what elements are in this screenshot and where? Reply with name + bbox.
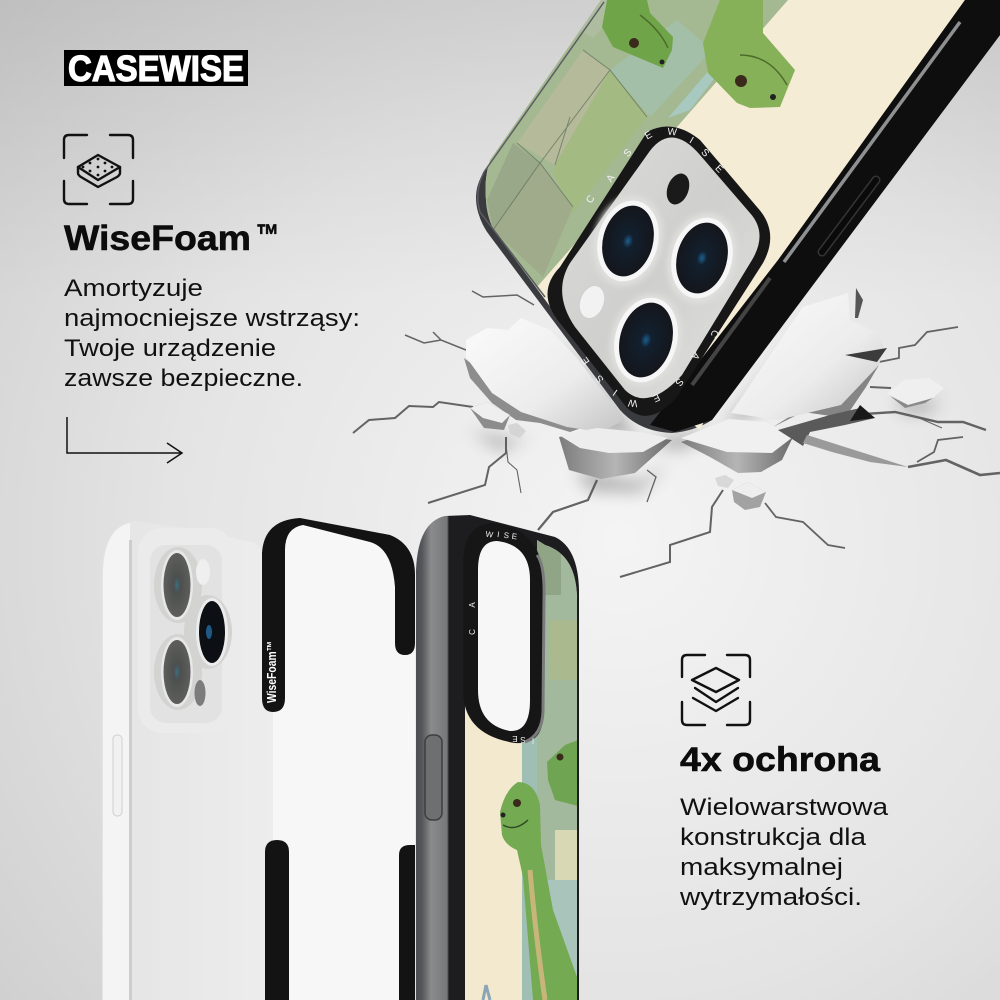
ring lettering: E	[511, 532, 518, 541]
wall crack: centre slabs	[559, 419, 793, 510]
camera opening	[478, 541, 530, 731]
ring lettering: C	[584, 193, 598, 206]
ring lettering: E	[650, 391, 661, 404]
black side rail	[650, 0, 1000, 432]
camera ring	[548, 127, 770, 416]
small rocks, below	[715, 475, 766, 510]
case outer frame	[476, 0, 1000, 433]
camera ring	[463, 523, 543, 743]
case body	[416, 515, 579, 1000]
ring lettering: S	[699, 147, 711, 160]
lens one	[161, 550, 193, 620]
ring lettering: E	[713, 163, 725, 176]
side button	[822, 180, 876, 252]
ring lettering: A	[605, 172, 618, 184]
text block: 4x protection description	[679, 794, 889, 911]
ring lettering: S	[520, 735, 526, 744]
heading: WiseFoam: WiseFoam	[64, 219, 251, 258]
ring lettering: A	[468, 602, 477, 608]
dinosaur head two	[703, 0, 795, 108]
icon: foam pad in focus brackets	[64, 135, 133, 204]
text block: WiseFoam description: Amortyzuje	[64, 275, 203, 302]
text block: WiseFoam description: najmocniejsze wstrząsy:	[64, 305, 360, 332]
tile joints	[493, 50, 647, 230]
side button	[113, 735, 122, 816]
crack lines in the wall	[353, 291, 1000, 577]
camera plateau	[138, 528, 234, 733]
case artwork	[486, 0, 965, 430]
ring lettering: E	[579, 354, 592, 366]
flash and sensor	[575, 282, 609, 322]
lens two	[662, 211, 742, 305]
lens one	[588, 194, 668, 288]
text block: 4x protection description: konstrukcja dla	[680, 824, 867, 851]
lens halos	[583, 188, 747, 394]
left side band	[103, 523, 130, 1000]
ring lettering: E	[643, 129, 655, 142]
text block: WiseFoam description: zawsze bezpieczne.	[64, 365, 303, 392]
WiseFoam white insert	[273, 520, 415, 1000]
ring lettering: E	[512, 734, 518, 743]
ring lettering: A	[688, 350, 701, 362]
text block: 4x protection description: maksymalnej	[680, 854, 843, 881]
left rim highlight	[478, 2, 604, 297]
dinosaur one	[500, 782, 578, 1000]
ring lettering	[579, 127, 725, 408]
ring lettering: C	[707, 327, 721, 340]
ring lettering: I	[497, 530, 500, 539]
lens three	[161, 637, 193, 707]
text block: WiseFoam description	[64, 275, 360, 392]
text block: WiseFoam description: Twoje urządzenie	[64, 335, 276, 362]
ring lettering: S	[503, 531, 510, 540]
heading: WiseFoam: ™	[256, 219, 279, 252]
arrow	[67, 417, 182, 463]
wall crack: right slab	[731, 288, 944, 467]
WiseFoam black frame	[262, 518, 415, 1000]
rock, right	[887, 378, 944, 408]
flash and sensor	[196, 559, 210, 585]
ring lettering: S	[672, 376, 685, 388]
text block: 4x protection description: wytrzymałości.	[679, 884, 862, 911]
top phone in case	[470, 0, 1000, 440]
icon: stacked layers in focus brackets	[682, 655, 750, 725]
logo: CASEWISE	[68, 48, 244, 89]
text block: 4x protection description: Wielowarstwowa	[680, 794, 889, 821]
ring lettering: S	[622, 147, 635, 159]
bottom: bare white phone	[102, 521, 273, 1000]
frame label: WiseFoam™	[264, 641, 279, 703]
lens surrounds	[154, 547, 232, 710]
ring lettering: I	[532, 736, 534, 745]
camera plateau	[562, 138, 760, 398]
lens three	[605, 290, 687, 390]
case artwork	[465, 530, 580, 1000]
lens two	[196, 598, 228, 666]
ring lettering: I	[687, 135, 695, 146]
wall crack: left slab	[464, 318, 625, 438]
black case, side view	[416, 515, 580, 1000]
ring lettering	[468, 530, 534, 745]
dinosaur head one	[602, 0, 673, 68]
lower frame bars	[265, 840, 289, 1000]
ring lettering: S	[594, 372, 606, 385]
side button	[425, 735, 442, 820]
heading: 4x ochrona: 4x ochrona	[680, 741, 881, 779]
ring lettering: W	[627, 397, 638, 408]
ring lettering: W	[667, 127, 678, 138]
tap	[483, 985, 490, 1000]
ring lettering: W	[485, 530, 494, 540]
soft impact shadows	[470, 340, 945, 492]
small rocks, left	[470, 402, 526, 438]
ring lettering: I	[611, 387, 620, 397]
ring lettering: C	[468, 629, 477, 635]
dinosaur two	[547, 740, 578, 806]
